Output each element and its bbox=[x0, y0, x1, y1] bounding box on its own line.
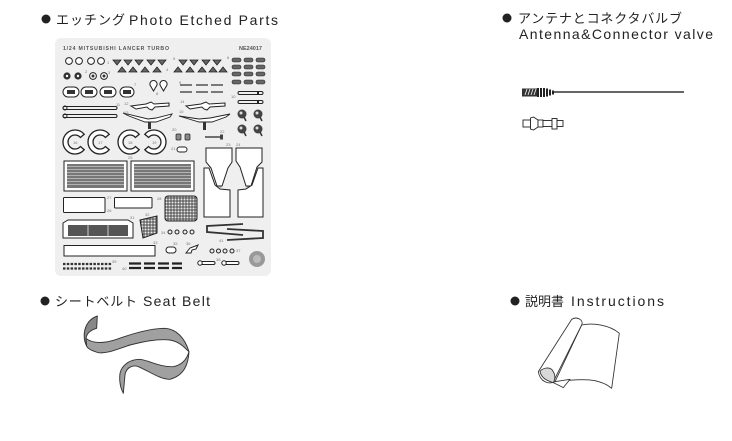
part numbers: 30 bbox=[246, 184, 251, 189]
icon: connector valve bbox=[523, 117, 563, 130]
parts: dashes 9 bbox=[180, 85, 223, 92]
part numbers: 37 bbox=[236, 248, 241, 253]
part numbers: 25 bbox=[128, 155, 133, 160]
sheet title: 1/24 MITSUBISHI LANCER TURBO bbox=[63, 46, 169, 52]
part numbers: 34 bbox=[161, 230, 166, 235]
parts: oval plates bbox=[63, 87, 134, 97]
part: panel 31 bbox=[63, 220, 133, 238]
icon: instruction booklet bbox=[538, 318, 619, 388]
heading: instructions: 説明書 bbox=[525, 294, 564, 309]
parts: ring row bbox=[66, 58, 104, 64]
part: grille 25 right bbox=[131, 161, 194, 191]
heading: antenna and connector valve: アンテナとコネクタバルブ bbox=[518, 11, 682, 26]
part numbers: 17 bbox=[98, 140, 103, 145]
part: strip 33 bbox=[64, 246, 155, 256]
part numbers: 8 bbox=[156, 91, 159, 96]
part: mesh 28 bbox=[165, 196, 197, 221]
part: arm 13 bbox=[123, 113, 172, 129]
part numbers: 28 bbox=[157, 196, 162, 201]
heading: photo etched parts: エッチング bbox=[56, 12, 125, 28]
icon: antenna bbox=[522, 88, 684, 97]
part numbers: 5 bbox=[173, 56, 176, 61]
parts: panels 29 30 bbox=[204, 168, 263, 217]
heading: instructions bbox=[510, 293, 664, 309]
part numbers bbox=[73, 55, 251, 271]
part numbers: 9 bbox=[179, 80, 182, 85]
part numbers: 31 bbox=[130, 215, 135, 220]
part numbers: 21 bbox=[171, 146, 176, 151]
part: zigzag 41 bbox=[207, 224, 263, 240]
part: arm 15 bbox=[179, 114, 230, 130]
part numbers: 10 bbox=[231, 94, 236, 99]
part numbers: 40 bbox=[122, 266, 127, 271]
part numbers: 6 bbox=[227, 55, 230, 60]
part numbers: 4 bbox=[166, 67, 169, 72]
part numbers: 23 bbox=[226, 142, 231, 147]
part: grille 25 left bbox=[64, 161, 127, 191]
parts: keyed rods 38 bbox=[198, 261, 239, 265]
part numbers: 26 bbox=[107, 208, 112, 213]
part numbers: 22 bbox=[220, 129, 225, 134]
part numbers: 2 bbox=[85, 69, 88, 74]
part: bracket 14 bbox=[186, 102, 225, 110]
part numbers: 7 bbox=[134, 82, 137, 87]
parts: panels 23 24 bbox=[206, 148, 262, 186]
parts: C rings bbox=[63, 130, 166, 154]
part numbers: 35 bbox=[173, 241, 178, 246]
part numbers: 41 bbox=[219, 238, 224, 243]
heading: seat belt bbox=[40, 293, 210, 309]
heading: photo etched parts bbox=[42, 12, 278, 28]
part numbers: 18 bbox=[128, 140, 133, 145]
part numbers: 12 bbox=[124, 101, 129, 106]
parts: plain rectangles 26 27 bbox=[64, 198, 152, 212]
part numbers: 16 bbox=[73, 140, 78, 145]
part numbers: 32 bbox=[145, 212, 150, 217]
part numbers: 14 bbox=[180, 99, 185, 104]
parts: long rods bbox=[63, 106, 117, 118]
parts: triangle rows right bbox=[174, 60, 227, 72]
part numbers: 15 bbox=[179, 109, 184, 114]
parts: 35 36 hook bbox=[166, 245, 198, 253]
parts: teardrops bbox=[150, 81, 167, 91]
parts: ring row 34 bbox=[168, 230, 194, 234]
sheet code: NE24017 bbox=[239, 46, 262, 52]
heading: antenna and connector valve bbox=[502, 11, 713, 42]
part numbers: 39 bbox=[112, 259, 117, 264]
part numbers: 11 bbox=[116, 102, 121, 107]
heading: antenna and connector valve: Antenna&Connector valve bbox=[519, 26, 713, 42]
parts: four curled plates bbox=[238, 110, 262, 136]
part numbers: 38 bbox=[216, 257, 221, 262]
parts: triangle rows left bbox=[113, 60, 166, 72]
part numbers: 3 bbox=[108, 70, 111, 75]
part numbers: 20 bbox=[172, 127, 177, 132]
parts: dashes 40 bbox=[129, 264, 182, 268]
part numbers: 1 bbox=[107, 60, 110, 65]
parts: oval grid bbox=[232, 58, 265, 84]
part: mesh 32 bbox=[140, 216, 157, 238]
heading: seat belt: シートベルト bbox=[55, 294, 137, 309]
part numbers: 27 bbox=[107, 195, 112, 200]
part numbers: 33 bbox=[153, 240, 158, 245]
part numbers: 29 bbox=[217, 184, 222, 189]
parts: rods 10 bbox=[238, 91, 263, 104]
part numbers: 19 bbox=[152, 140, 157, 145]
heading: photo etched parts: Photo Etched Parts bbox=[129, 12, 278, 28]
parts: dots 39 bbox=[63, 264, 112, 268]
part numbers: 24 bbox=[236, 142, 241, 147]
heading: seat belt: Seat Belt bbox=[143, 293, 210, 309]
parts: small discs bbox=[63, 72, 107, 80]
icon: seat belt bbox=[84, 316, 189, 393]
parts: 20 21 22 bbox=[176, 134, 223, 152]
part numbers: 13 bbox=[124, 110, 129, 115]
icon: maker logo bbox=[249, 251, 265, 267]
parts: ring row 37 bbox=[210, 249, 234, 253]
part: bracket 12 bbox=[131, 102, 169, 110]
heading: instructions: Instructions bbox=[571, 293, 664, 309]
part numbers: 36 bbox=[186, 241, 191, 246]
panel: photo etched sheet bbox=[55, 38, 271, 276]
